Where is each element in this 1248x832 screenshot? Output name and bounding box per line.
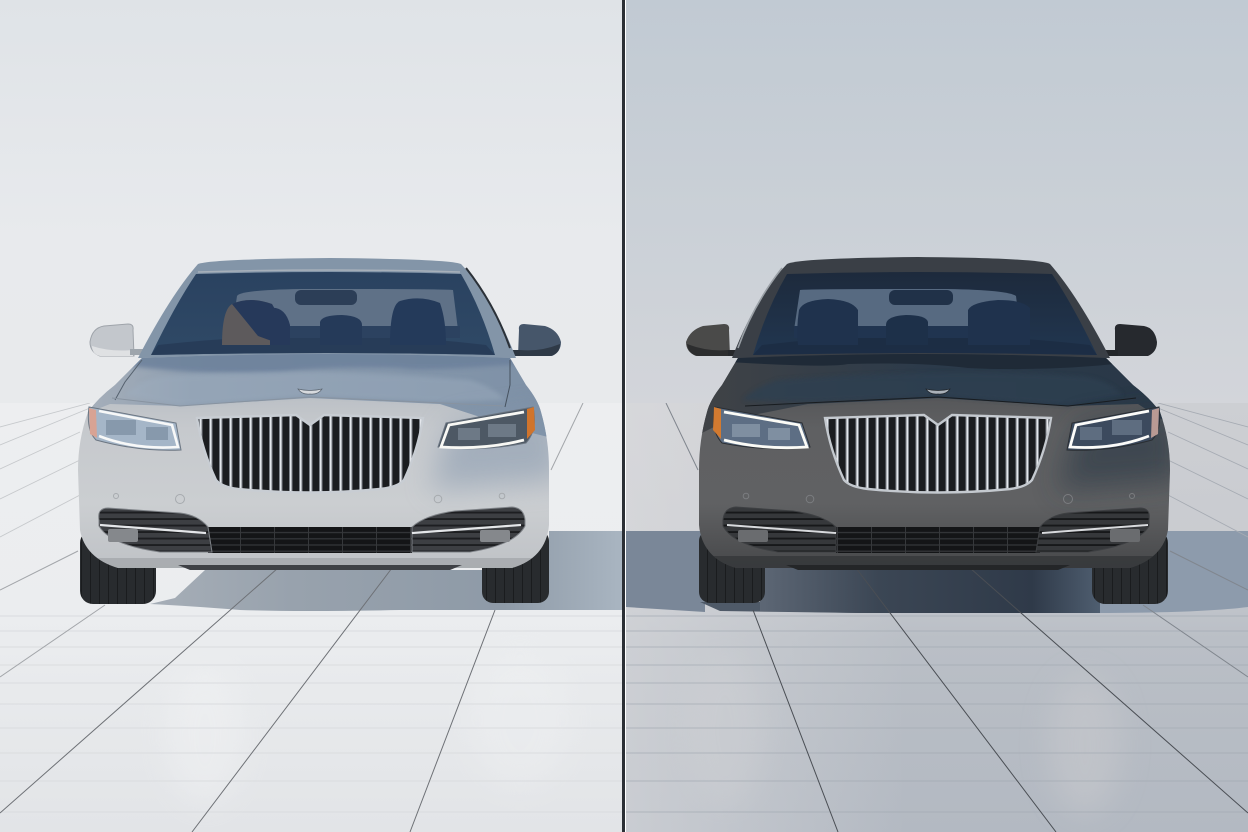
grille xyxy=(825,415,1051,492)
showroom floor xyxy=(626,403,1248,832)
tyres xyxy=(80,530,549,604)
parking sensors xyxy=(743,493,1134,504)
lower air intake: driver side xyxy=(723,507,836,552)
bumper lower shade xyxy=(688,556,1178,570)
windshield xyxy=(151,270,495,355)
car: graphite sedan xyxy=(686,257,1178,604)
parking sensors xyxy=(114,493,505,504)
hood emblem xyxy=(298,389,322,394)
grille xyxy=(197,415,423,492)
headlight: left xyxy=(88,407,181,450)
roof and pillars xyxy=(138,258,516,358)
mirror: left xyxy=(90,324,150,356)
lower air intake: centre xyxy=(208,527,412,553)
floor tile lines xyxy=(626,403,1248,832)
seats xyxy=(797,299,1030,345)
lower air intake: left xyxy=(99,508,212,552)
headlight: driver side xyxy=(713,407,810,449)
roof and pillars xyxy=(732,257,1110,358)
hood xyxy=(688,350,1178,490)
mirror: passenger side xyxy=(1100,324,1157,356)
body xyxy=(78,354,549,568)
panel divider xyxy=(622,0,625,832)
chin spoiler xyxy=(178,565,462,570)
body xyxy=(699,354,1170,568)
floor shadow xyxy=(626,531,1248,613)
headlight: passenger side xyxy=(1067,407,1160,450)
rear-view mirror xyxy=(295,290,357,305)
hood xyxy=(70,350,560,490)
seats xyxy=(222,298,446,345)
hood emblem xyxy=(926,389,950,394)
floor shadow xyxy=(150,531,622,611)
panel: graphite car scene xyxy=(626,0,1248,832)
lower air intake: centre xyxy=(836,527,1040,553)
dashboard xyxy=(151,338,495,355)
bumper lower shade xyxy=(98,558,532,568)
lower air intake: right xyxy=(412,507,525,552)
lower air intake: passenger side xyxy=(1036,508,1149,552)
mirror: right xyxy=(512,324,561,356)
backdrop wall xyxy=(0,0,622,404)
tyres xyxy=(699,530,1168,604)
dashboard xyxy=(754,339,1096,355)
headlight: right xyxy=(438,407,535,449)
backdrop wall xyxy=(626,0,1248,404)
windshield xyxy=(753,272,1097,355)
panel: silver car scene xyxy=(0,0,622,832)
chin spoiler xyxy=(786,565,1070,570)
floor tile lines xyxy=(0,403,622,832)
car: silver sedan xyxy=(70,258,561,604)
showroom floor xyxy=(0,403,622,832)
mirror: driver side xyxy=(686,324,736,356)
rear-view mirror xyxy=(889,290,953,305)
